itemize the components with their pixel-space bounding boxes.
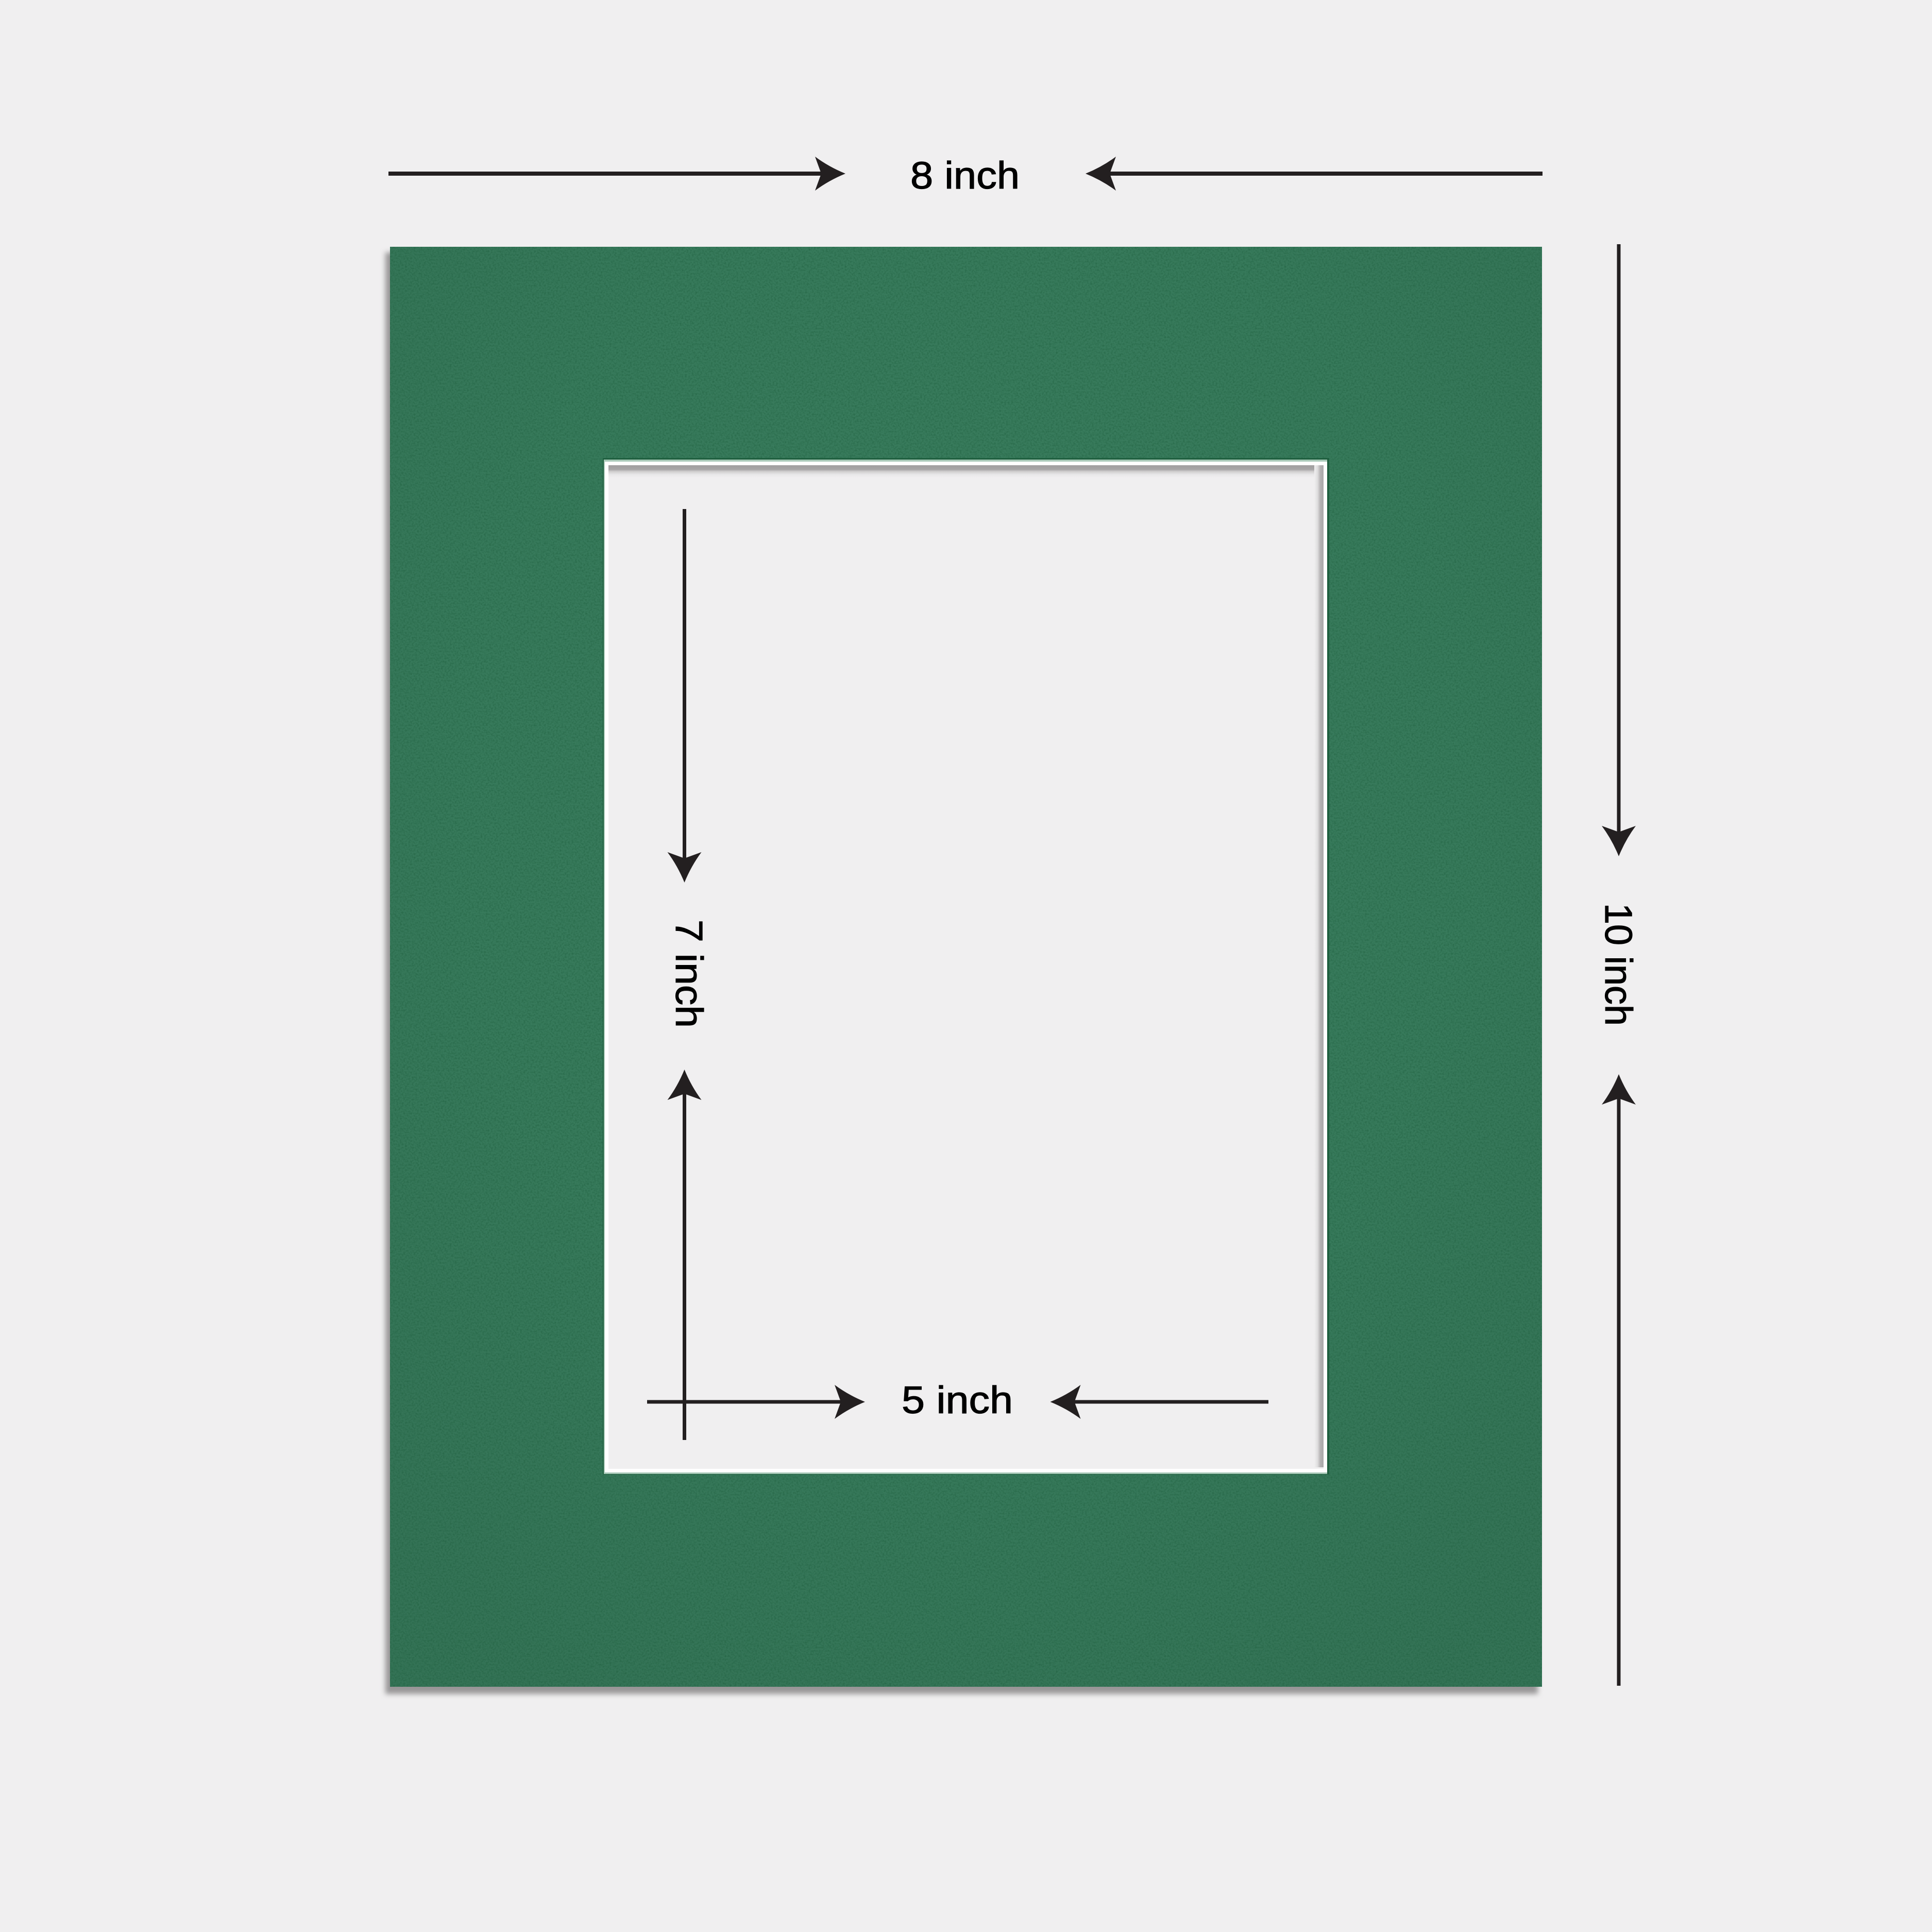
label: 7 inch: 7 inch	[668, 920, 710, 1028]
bevel pale green edge	[604, 460, 1327, 1474]
arrow: top left pointing right	[388, 157, 845, 191]
label: 10 inch: 10 inch	[1597, 903, 1640, 1026]
label: 8 inch: 8 inch	[910, 154, 1020, 197]
arrow: opening pointing right	[647, 1385, 865, 1419]
label: 5 inch: 5 inch	[902, 1379, 1013, 1421]
inner top shadow	[608, 465, 1324, 478]
panel: green mat board	[390, 247, 1542, 1687]
mat board surface	[390, 247, 1542, 1687]
bevel white core	[605, 462, 1327, 1472]
arrow: opening pointing down	[668, 509, 702, 883]
arrow: right side pointing up	[1602, 1074, 1636, 1686]
inner right shadow	[1314, 465, 1324, 1467]
bevel dark cut edge	[603, 458, 1329, 1475]
dimension: 5 inch opening width	[647, 1379, 1268, 1421]
mat board paper grain	[390, 247, 1542, 1687]
dimension: 8 inch width	[388, 154, 1543, 197]
panel: mat opening with bevel	[603, 458, 1329, 1475]
dimension: 10 inch height	[1597, 244, 1640, 1686]
arrow: right side pointing down	[1602, 244, 1636, 856]
arrow: top right pointing left	[1086, 157, 1543, 191]
arrow: opening pointing up	[668, 1070, 702, 1440]
dimension: 7 inch opening height	[668, 509, 710, 1440]
opening interior	[608, 465, 1324, 1469]
mat board drop shadow	[385, 252, 1538, 1694]
arrow: opening pointing left	[1050, 1385, 1268, 1419]
